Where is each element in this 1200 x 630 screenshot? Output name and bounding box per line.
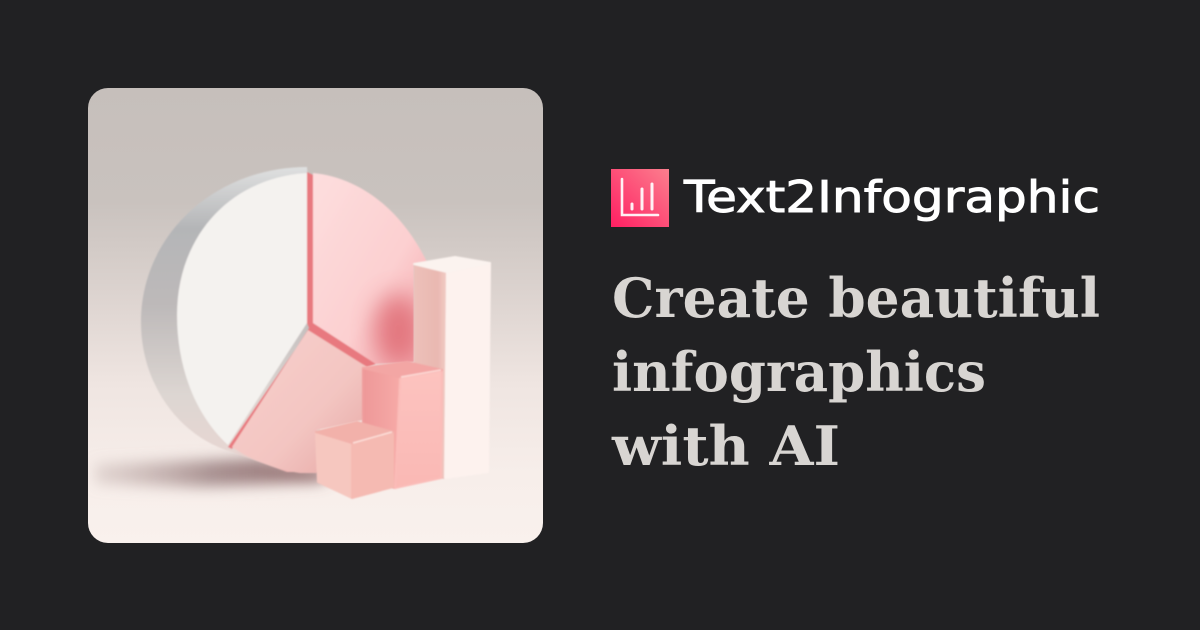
pie inner shadow [374,294,422,366]
headline: Create beautiful [612,266,1100,330]
logo icon [611,169,669,227]
pie slice: lower pink [232,330,367,473]
headline: with AI [611,414,840,478]
headline [611,266,1100,478]
brand name: Text2Infographic [683,172,1100,223]
pie slice: upper pink [313,173,427,364]
pie chart [141,167,427,473]
pie edge [141,167,320,472]
image panel: 3D pie and bar chart [88,88,543,543]
cube [316,422,393,498]
logo [611,169,1100,227]
floor shadow [95,458,335,487]
headline: infographics [612,340,986,404]
tall bar [414,257,490,478]
pie divider [228,172,376,449]
middle bar [363,362,442,488]
pie slice: white [177,173,307,445]
bar chart [316,257,490,498]
